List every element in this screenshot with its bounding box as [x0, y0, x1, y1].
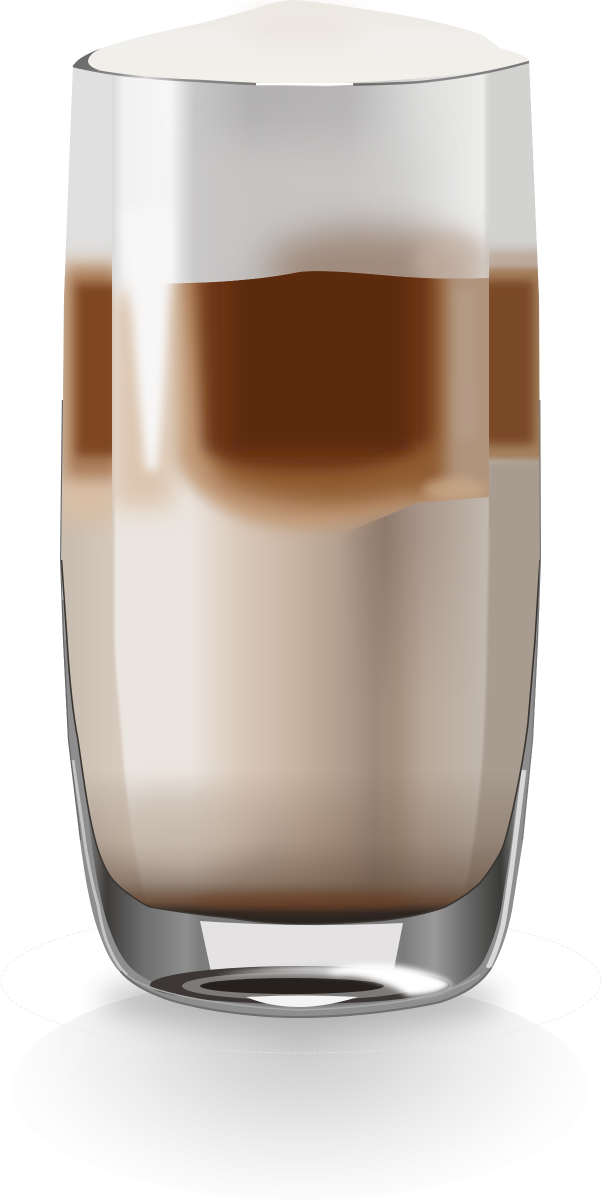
rim — [73, 48, 529, 85]
base window — [200, 921, 403, 972]
foam peak tint — [238, 8, 362, 48]
glass body — [50, 30, 548, 1025]
cream edge over coffee — [353, 497, 489, 636]
lower left pane — [62, 519, 141, 891]
glass outer edge — [60, 400, 541, 1018]
floor shadow — [1, 909, 601, 1200]
white streak band — [112, 210, 174, 508]
center coffee — [176, 250, 505, 528]
base lens dark ring — [150, 964, 452, 1007]
cream base — [55, 240, 545, 940]
liquid dark outline — [62, 560, 540, 924]
lower right pane — [468, 515, 540, 888]
right coffee strip — [489, 60, 540, 530]
glass wall and base — [55, 600, 545, 1025]
foam zone — [65, 64, 536, 294]
left coffee strip — [62, 248, 112, 527]
bottom liquid shading — [86, 776, 516, 924]
foam top — [88, 0, 528, 84]
liquid layers — [50, 30, 548, 940]
